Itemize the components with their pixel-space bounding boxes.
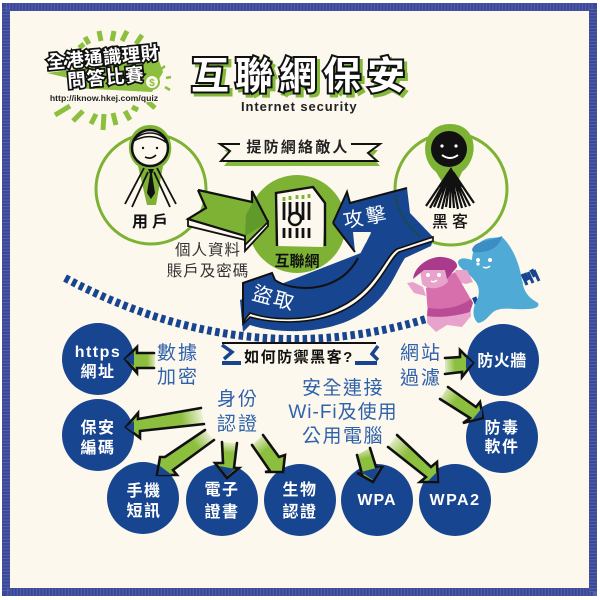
label: website filtering: 網站 — [400, 342, 442, 364]
arrow to https — [125, 347, 155, 373]
node: https: https — [75, 344, 121, 361]
banner text: 提防網絡敵人 — [246, 138, 350, 156]
hacker body — [426, 167, 474, 209]
label: personal data: 賬戶及密碼 — [167, 262, 249, 280]
building icon — [276, 187, 325, 247]
label: personal data: 個人資料 — [175, 241, 241, 259]
arrow to WPA2 — [388, 435, 438, 482]
node: antivirus: 防毒 — [484, 418, 520, 437]
label: data encryption: 加密 — [157, 366, 199, 388]
dollar icon: $ — [149, 78, 155, 89]
node: e-certificate: 證書 — [204, 502, 240, 521]
arrow body — [243, 188, 433, 322]
arms — [407, 270, 473, 296]
hacker head — [431, 131, 467, 167]
arrow white edge — [243, 237, 433, 324]
quiz badge — [46, 31, 171, 130]
label: website filtering: 過濾 — [400, 367, 442, 389]
characters — [407, 236, 539, 332]
badge url: http://iknow.hkej.com/quiz — [50, 93, 159, 103]
arrow outline — [243, 188, 407, 322]
label: secure connection — [288, 377, 398, 447]
label: identity verification: 身份 — [217, 388, 259, 410]
green arrow: personal data to internet — [188, 190, 268, 251]
badge green highlight — [47, 58, 163, 92]
badge title: 問答比賽 — [67, 64, 145, 91]
user head — [132, 130, 168, 166]
stripes — [522, 270, 539, 285]
label: data encryption — [157, 342, 199, 388]
node: WPA2 — [419, 464, 491, 536]
hacker figure — [395, 124, 507, 245]
hacker green glow — [425, 124, 474, 185]
user label: 用戶 — [132, 213, 172, 231]
node: https — [62, 323, 134, 395]
label: secure connection: Wi-Fi及使用 — [288, 401, 398, 423]
badge title: 全港通識理財 — [46, 42, 160, 73]
label: identity verification: 認證 — [217, 413, 259, 435]
arrow to antivirus — [440, 387, 483, 423]
node: antivirus: 軟件 — [484, 438, 520, 456]
node: sms — [107, 462, 179, 534]
title: 互聯網保安 — [191, 56, 411, 98]
arrow to sms — [157, 430, 214, 475]
arrow to firewall — [445, 350, 473, 377]
banner: watch out for enemies — [220, 138, 380, 166]
subtitle: Internet security — [241, 99, 357, 114]
arrow to security code — [126, 408, 204, 438]
hacker label: 黑客 — [432, 212, 472, 231]
node: e-certificate — [186, 464, 258, 536]
node: WPA2: WPA2 — [429, 492, 481, 509]
user green glow — [129, 125, 171, 205]
arrow to biometrics — [252, 435, 285, 472]
attack label: 攻擊 — [341, 202, 391, 233]
face — [420, 268, 448, 288]
arrow to WPA — [357, 448, 382, 482]
node: security code: 保安 — [80, 418, 116, 437]
badge title — [46, 42, 160, 91]
label: website filtering — [400, 342, 442, 389]
node: security code — [62, 399, 134, 471]
node: sms: 短訊 — [126, 501, 162, 520]
dashed divider arc — [65, 272, 535, 339]
hair — [413, 257, 457, 279]
label: personal data — [167, 241, 249, 280]
blue arrow: attack and theft — [240, 188, 433, 332]
branch arrows — [125, 347, 483, 482]
node: WPA — [341, 464, 413, 536]
internet label: 互聯網 — [274, 252, 320, 270]
user body — [125, 168, 176, 207]
node: biometrics — [264, 464, 336, 536]
node: firewall: 防火牆 — [477, 351, 527, 370]
blue character — [458, 236, 538, 323]
arrow to e-certificate — [215, 442, 239, 478]
node: e-certificate: 電子 — [204, 481, 240, 499]
steal label: 盜取 — [250, 282, 298, 315]
node: https: 網址 — [80, 363, 116, 381]
internet node — [248, 175, 346, 273]
pink character — [407, 257, 473, 332]
node: biometrics: 認證 — [282, 502, 318, 521]
dress — [426, 272, 473, 317]
node: firewall — [467, 324, 539, 396]
badge sun rays — [55, 31, 171, 130]
banner: how to prevent hackers — [222, 343, 378, 366]
node: biometrics: 生物 — [282, 481, 318, 499]
label: data encryption: 數據 — [157, 342, 199, 364]
node: sms: 手機 — [126, 481, 162, 500]
label: secure connection: 安全連接 — [302, 377, 384, 399]
banner text: 如何防禦黑客? — [244, 348, 354, 366]
node: security code: 編碼 — [80, 439, 116, 457]
legs — [427, 305, 471, 332]
arrow shadow — [240, 230, 433, 332]
label: identity verification — [217, 388, 259, 435]
user figure — [96, 125, 206, 244]
label: secure connection: 公用電腦 — [302, 425, 384, 447]
node: antivirus — [466, 401, 538, 473]
node: WPA: WPA — [357, 492, 397, 509]
